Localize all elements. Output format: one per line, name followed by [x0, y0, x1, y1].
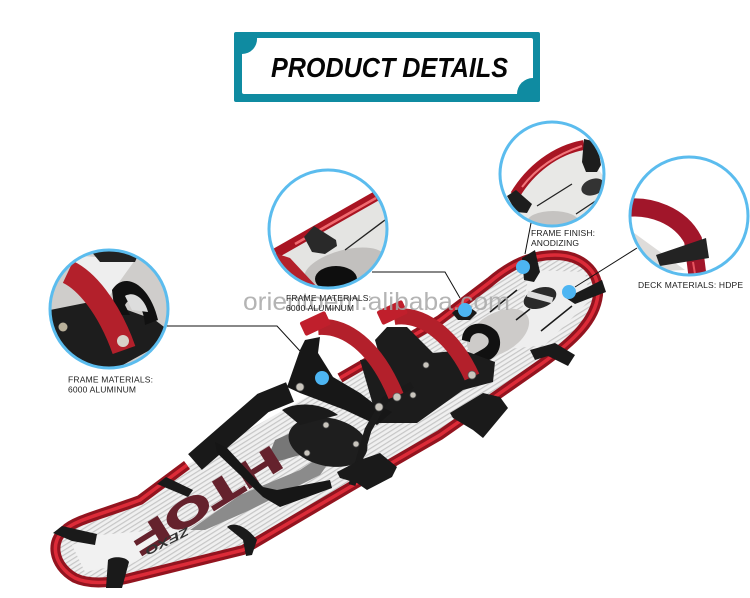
deck — [55, 255, 598, 583]
label: frame materials middle: 6000 ALUMINUM — [286, 303, 354, 313]
leader line: binding — [167, 326, 300, 351]
aluminium frame — [55, 255, 598, 583]
leader line: deck — [575, 248, 637, 287]
front binding plate — [287, 337, 392, 425]
label: frame finish: ANODIZING — [531, 238, 579, 248]
heel lift — [462, 324, 500, 362]
leader line: frame finish — [525, 223, 531, 254]
red buckles — [299, 300, 408, 336]
detail circle: frame clip — [268, 168, 388, 290]
watermark: orientoem.alibaba.com — [243, 288, 510, 316]
smooth deck areas — [72, 527, 190, 572]
snowshoe product photo — [53, 250, 606, 588]
label: frame materials left: FRAME MATERIALS: — [68, 374, 153, 384]
deck small brand: ZEXO — [142, 524, 193, 557]
label: frame finish: FRAME FINISH: — [531, 228, 595, 238]
label: deck materials: DECK MATERIALS: HDPE — [638, 280, 743, 290]
deck grey camouflage — [190, 440, 345, 530]
marker dots — [315, 260, 576, 385]
label: frame materials left: 6000 ALUMINUM — [68, 384, 136, 394]
rivets — [296, 362, 476, 456]
label: frame materials middle: FRAME MATERIALS: — [286, 293, 371, 303]
toe plate — [284, 410, 372, 474]
frame clips — [53, 250, 606, 588]
detail circle: frame finish — [498, 120, 607, 233]
crossing strap — [352, 385, 412, 485]
detail circle: binding strap — [50, 250, 170, 372]
detail circle: deck material — [626, 155, 750, 280]
logo oval and slits — [490, 283, 572, 331]
black toe straps — [195, 392, 290, 462]
deck lettering: HTOF — [124, 438, 289, 563]
heading banner — [234, 32, 540, 102]
toe bar — [215, 442, 332, 507]
red straps — [318, 316, 472, 396]
rear binding plate — [360, 327, 495, 423]
leader line: frame clip — [372, 272, 460, 298]
heading text: PRODUCT DETAILS — [271, 52, 509, 83]
